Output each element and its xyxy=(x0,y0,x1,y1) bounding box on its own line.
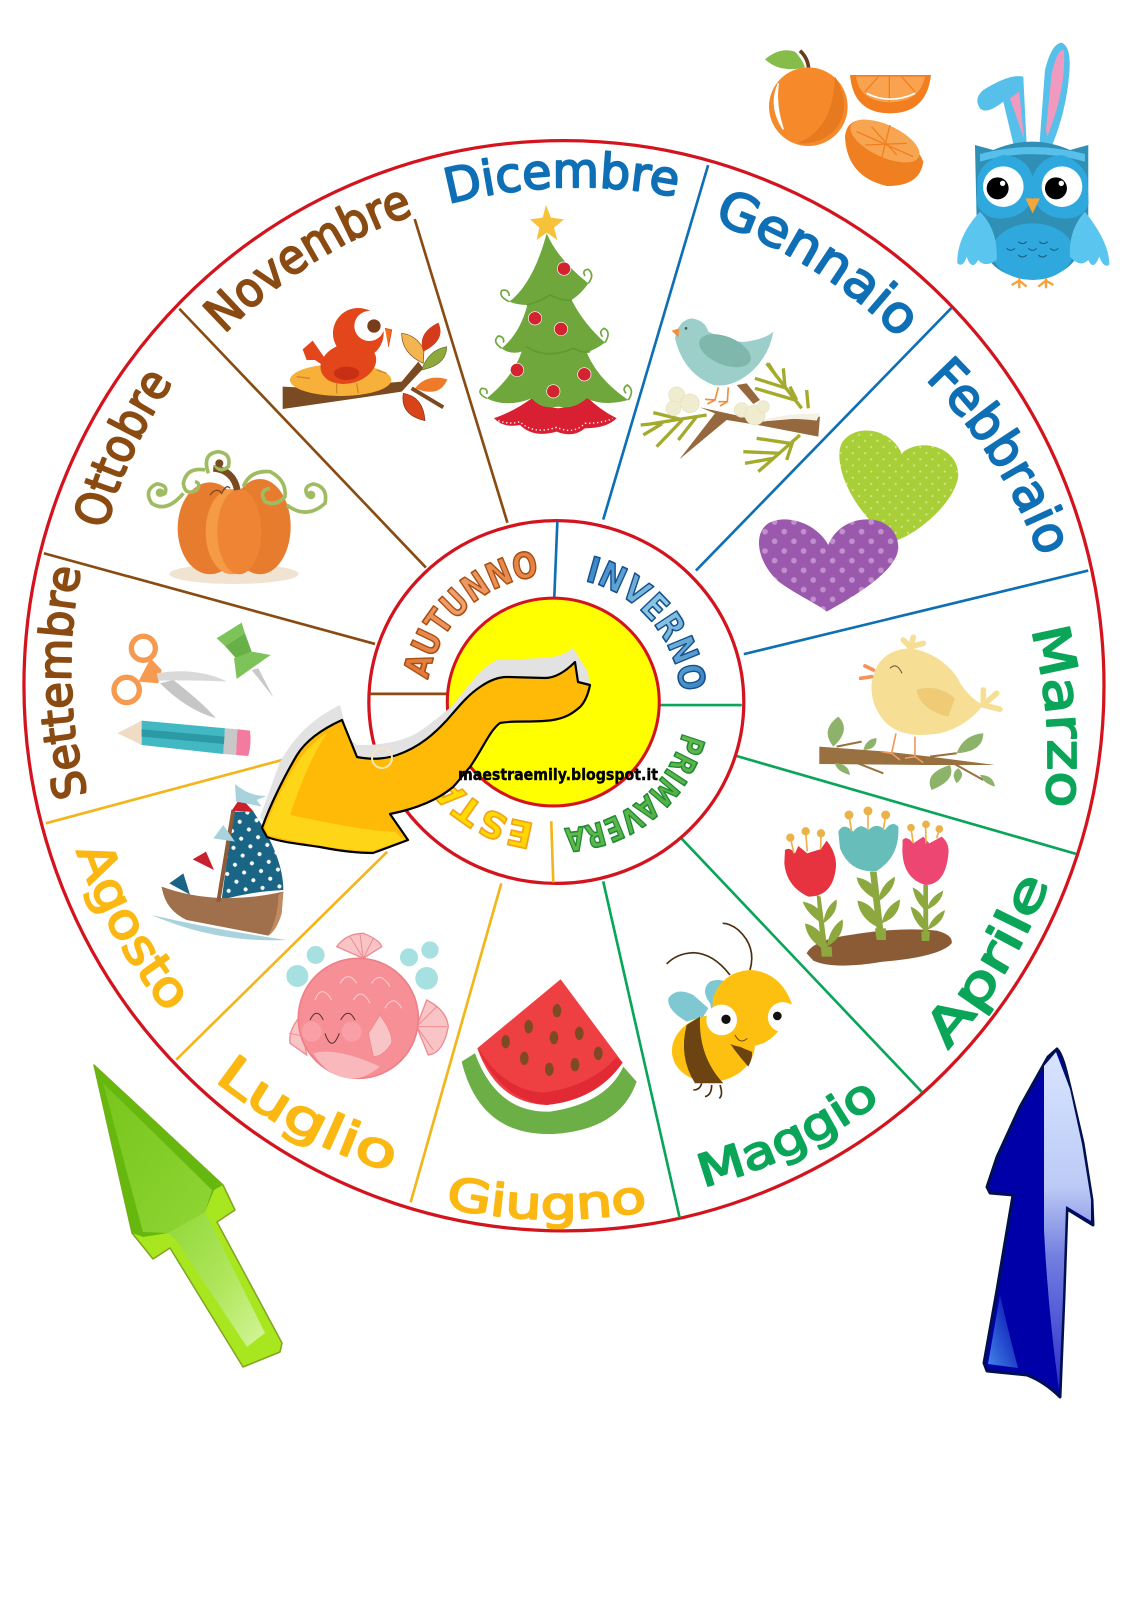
month labels xyxy=(36,150,1078,1230)
spring dividers xyxy=(603,756,1076,1218)
yellow hub xyxy=(447,598,659,806)
icon: yellow chick on branch xyxy=(819,637,1000,790)
ESTATE: ESTATE xyxy=(436,786,532,850)
blue arrow xyxy=(984,1049,1093,1397)
Gennaio: Gennaio xyxy=(720,192,914,334)
watermark swirl xyxy=(372,748,392,768)
summer dividers xyxy=(46,759,501,1202)
green arrow base xyxy=(94,1065,282,1367)
Maggio: Maggio xyxy=(697,1086,876,1187)
winter dividers xyxy=(603,165,1088,654)
icon: watermelon xyxy=(462,979,637,1134)
AUTUNNO: AUTUNNO xyxy=(404,551,536,680)
INVERNO: INVERNO xyxy=(586,556,706,690)
Giugno: Giugno xyxy=(450,1178,644,1230)
Agosto: Agosto xyxy=(75,850,184,1008)
center orange arrow xyxy=(260,648,590,853)
Luglio: Luglio xyxy=(218,1054,394,1168)
blue arrow lower reflection xyxy=(988,1295,1018,1368)
Dicembre: Dicembre xyxy=(444,150,678,204)
arrow body xyxy=(262,662,590,853)
icon: oranges xyxy=(765,50,931,186)
green arrow head xyxy=(94,1065,223,1237)
icon: bee xyxy=(667,923,792,1098)
Novembre: Novembre xyxy=(202,192,412,332)
blue arrow highlight xyxy=(1044,1052,1091,1390)
icon: tulips xyxy=(784,807,952,966)
outer wheel circle xyxy=(24,141,1104,1231)
icon: bird in nest xyxy=(283,308,447,421)
seasons ring xyxy=(367,519,746,885)
icon: owl with bunny ears xyxy=(957,43,1109,288)
arrow head bevel xyxy=(265,733,404,851)
Settembre: Settembre xyxy=(36,567,87,799)
green arrow shaft xyxy=(168,1212,265,1347)
blue arrow body xyxy=(984,1049,1093,1397)
icon: christmas tree xyxy=(480,205,631,434)
arrow shadow xyxy=(260,648,590,830)
month wheel xyxy=(22,139,1106,1232)
icon: winter bird on branch xyxy=(641,318,820,472)
icon: sailboat xyxy=(152,784,287,940)
Aprile: Aprile xyxy=(932,878,1048,1051)
autumn dividers xyxy=(44,219,507,644)
icon: pumpkin xyxy=(148,452,326,584)
icon: pink fish xyxy=(286,933,448,1079)
watermark text: maestraemily.blogspot.it xyxy=(458,765,658,784)
Ottobre: Ottobre xyxy=(74,372,172,524)
PRIMAVERA: PRIMAVERA xyxy=(564,734,706,852)
green arrow xyxy=(94,1065,282,1367)
Marzo: Marzo xyxy=(1032,626,1078,806)
icon: polka dot hearts xyxy=(759,430,958,612)
Febbraio: Febbraio xyxy=(928,356,1064,552)
icon: scissors, push pin and pencil xyxy=(114,623,273,756)
